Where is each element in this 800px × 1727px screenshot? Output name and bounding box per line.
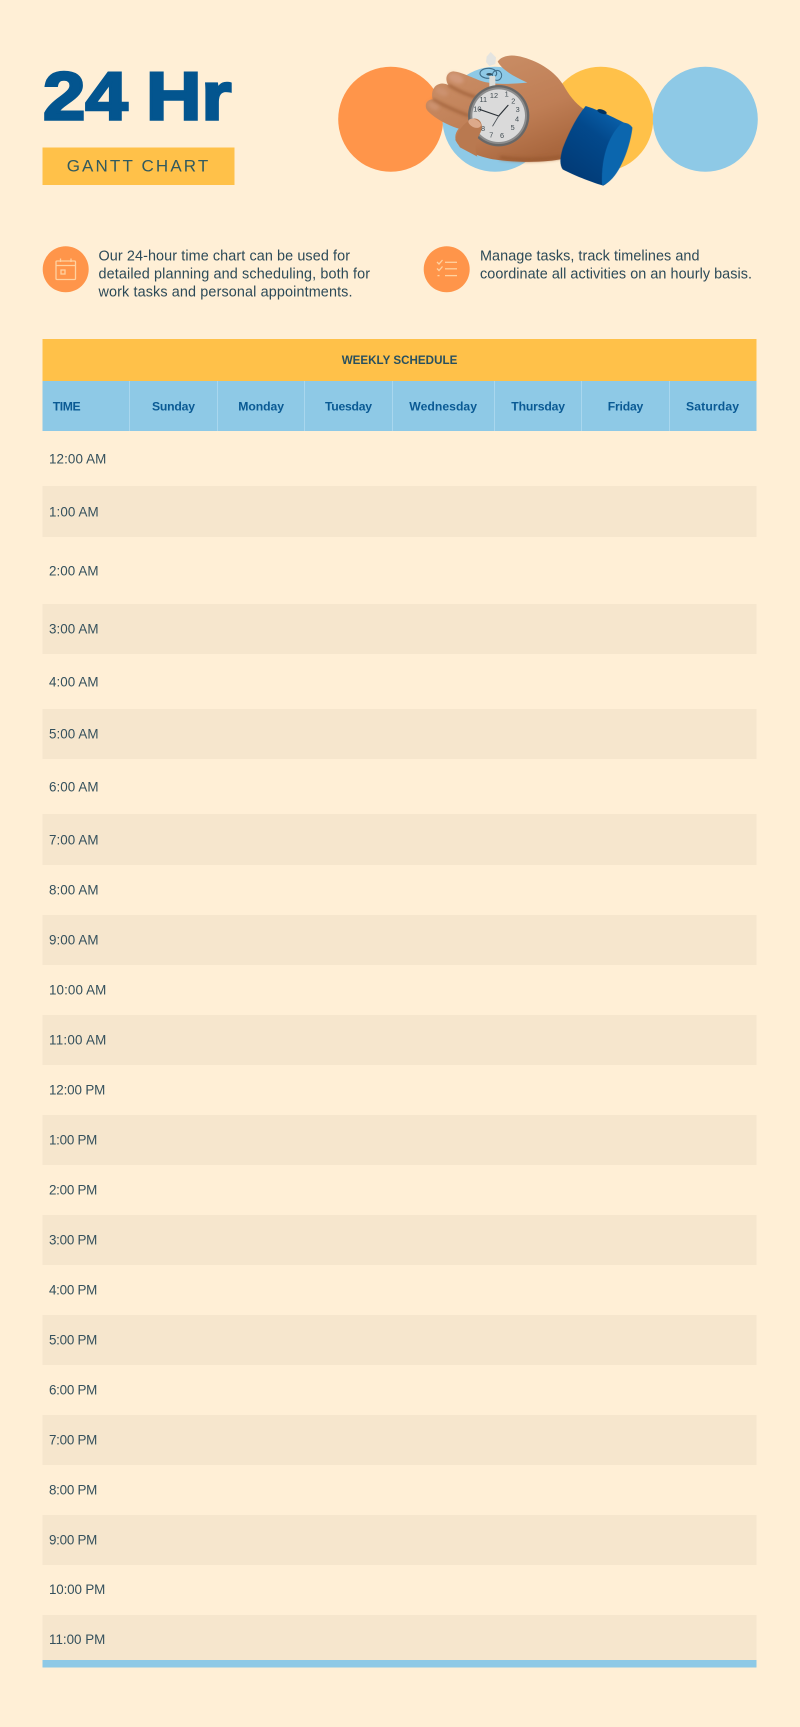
alternating row stripes: [42, 486, 756, 1660]
time labels: 4:00 PM: [49, 1282, 97, 1297]
time labels: 8:00 AM: [49, 882, 98, 897]
time labels: 2:00 PM: [49, 1182, 97, 1197]
watch: 7: [489, 130, 493, 139]
title: Hr: [146, 59, 231, 134]
schedule table: [42, 339, 756, 1668]
time labels: 7:00 AM: [49, 832, 98, 847]
time labels: 1:00 AM: [49, 505, 99, 520]
description text: Our 24-hour time chart can be used for: [98, 249, 350, 265]
time labels: 3:00 AM: [49, 621, 98, 636]
time labels: 10:00 AM: [49, 982, 106, 997]
subtitle badge: GANTT CHART: [67, 156, 208, 175]
icon: checklist: [424, 246, 470, 292]
front finger: [455, 117, 482, 157]
sleeve cuff: [560, 106, 632, 186]
info item: planning: [43, 246, 370, 301]
description text: coordinate all activities on an hourly basis.: [480, 267, 752, 283]
day header row: Sunday: [152, 399, 195, 413]
table title bar: WEEKLY SCHEDULE: [342, 354, 458, 367]
watch: 2: [511, 96, 515, 105]
time labels: 3:00 PM: [49, 1232, 97, 1247]
time labels: 9:00 AM: [49, 932, 98, 947]
time labels: [49, 451, 106, 1647]
info item: tasks: [424, 246, 752, 292]
watch: 6: [500, 131, 504, 140]
time labels: 6:00 AM: [49, 779, 98, 794]
watch: 8: [481, 124, 485, 133]
icon: calendar: [43, 246, 89, 292]
time labels: 7:00 PM: [49, 1432, 97, 1447]
watch: 12: [490, 91, 498, 100]
day header row: Friday: [608, 399, 644, 413]
bottom bar: [42, 1660, 756, 1668]
decorative circles: [338, 67, 758, 172]
watch bow and crown: [480, 52, 502, 87]
time labels: 12:00 AM: [49, 451, 106, 466]
watch: 10: [473, 104, 481, 113]
time labels: 11:00 AM: [49, 1032, 106, 1047]
table title bar: [42, 339, 756, 381]
day header row: Thursday: [511, 399, 565, 413]
day header row: Tuesday: [325, 399, 372, 413]
day header row: TIME: [53, 399, 81, 413]
day header row: Wednesday: [409, 399, 477, 413]
description text: detailed planning and scheduling, both for: [98, 267, 370, 283]
time labels: 4:00 AM: [49, 674, 98, 689]
time labels: 6:00 PM: [49, 1382, 97, 1397]
title: 24: [43, 59, 128, 135]
description text: work tasks and personal appointments.: [98, 285, 352, 301]
subtitle badge: [42, 148, 234, 185]
day header row: Saturday: [686, 399, 739, 413]
watch: 4: [515, 114, 519, 123]
time labels: 5:00 AM: [49, 726, 98, 741]
illustration: hand holding pocket watch: [426, 52, 632, 186]
time labels: 12:00 PM: [49, 1082, 105, 1097]
description text: Manage tasks, track timelines and: [480, 249, 700, 265]
hand silhouette: [426, 56, 584, 162]
time labels: 5:00 PM: [49, 1332, 97, 1347]
watch: 11: [480, 95, 487, 104]
time labels: 8:00 PM: [49, 1482, 97, 1497]
description text: [98, 249, 370, 301]
title: [43, 59, 231, 135]
watch: [468, 85, 529, 146]
time labels: 10:00 PM: [49, 1582, 105, 1597]
time labels: 11:00 PM: [49, 1632, 105, 1647]
time labels: 2:00 AM: [49, 563, 98, 578]
time labels: 1:00 PM: [49, 1132, 97, 1147]
watch: 3: [516, 105, 520, 114]
description text: [480, 249, 752, 283]
watch: 1: [505, 90, 509, 99]
day header row: Monday: [238, 399, 284, 413]
day header row: [42, 381, 756, 431]
hand shading: [426, 71, 562, 160]
watch: 5: [511, 123, 515, 132]
time labels: 9:00 PM: [49, 1532, 97, 1547]
